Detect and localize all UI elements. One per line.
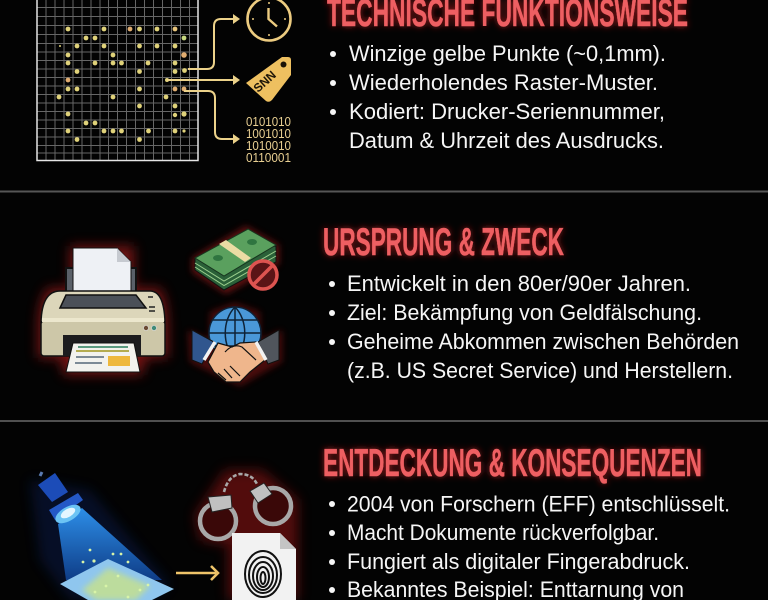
heading: Ursprung und Zweck <box>323 221 564 264</box>
arrows from grid to icons <box>167 14 240 144</box>
panel: technische Funktionsweise <box>37 0 688 165</box>
bullet list: ursprung <box>329 271 739 383</box>
icon: binary code <box>246 114 291 165</box>
icon: binary code: 1001010 <box>246 126 291 141</box>
bullet list: ursprung: Entwickelt in den 80er/90er Jahren. <box>347 271 691 296</box>
icon: clock <box>248 0 290 40</box>
heading: Ursprung und Zweck: URSPRUNG & ZWECK <box>323 221 564 264</box>
icon: handcuffs <box>195 470 298 600</box>
dot grid diagram <box>37 0 198 160</box>
panel: Entdeckung und Konsequenzen <box>30 442 730 600</box>
heading: Ursprung und Zweck: URSPRUNG & ZWECK <box>323 221 564 264</box>
bullet list: ursprung: Ziel: Bekämpfung von Geldfälschung. <box>347 300 702 325</box>
icon: binary code: 0101010 <box>246 114 291 129</box>
bullet list: technik: Wiederholendes Raster-Muster. <box>349 70 658 95</box>
bullet list: technik: Kodiert: Drucker-Seriennummer, <box>349 99 665 124</box>
icon: serial number tag <box>246 57 291 102</box>
icon: handshake with globe <box>188 303 282 386</box>
bullet list: entdeckung: Macht Dokumente rückverfolgbar. <box>347 520 659 545</box>
icon: binary code: 1010010 <box>246 138 291 153</box>
icon: cash with prohibition sign <box>192 226 279 294</box>
bullet list: technik: Datum & Uhrzeit des Ausdrucks. <box>349 128 664 153</box>
bullet list: ursprung: Geheime Abkommen zwischen Behörden <box>347 329 739 354</box>
icon: serial number tag: SNN <box>251 68 279 95</box>
bullet list: technik: Winzige gelbe Punkte (~0,1mm). <box>349 41 666 66</box>
bullet list: technik <box>330 41 666 153</box>
bullet list: entdeckung: Fungiert als digitaler Fingerabdruck. <box>347 549 690 574</box>
icon: printer <box>38 246 168 375</box>
panel: Ursprung und Zweck <box>38 221 739 386</box>
arrow to evidence <box>176 566 218 580</box>
icon: binary code: 0110001 <box>246 150 291 165</box>
bullet list: ursprung: (z.B. US Secret Service) und Herstellern. <box>347 358 733 383</box>
icon: fingerprint document <box>232 533 296 600</box>
icon: UV lamp with lit paper <box>30 472 174 600</box>
bullet list: entdeckung <box>329 492 730 600</box>
bullet list: entdeckung: 2004 von Forschern (EFF) entschlüsselt. <box>347 492 730 516</box>
